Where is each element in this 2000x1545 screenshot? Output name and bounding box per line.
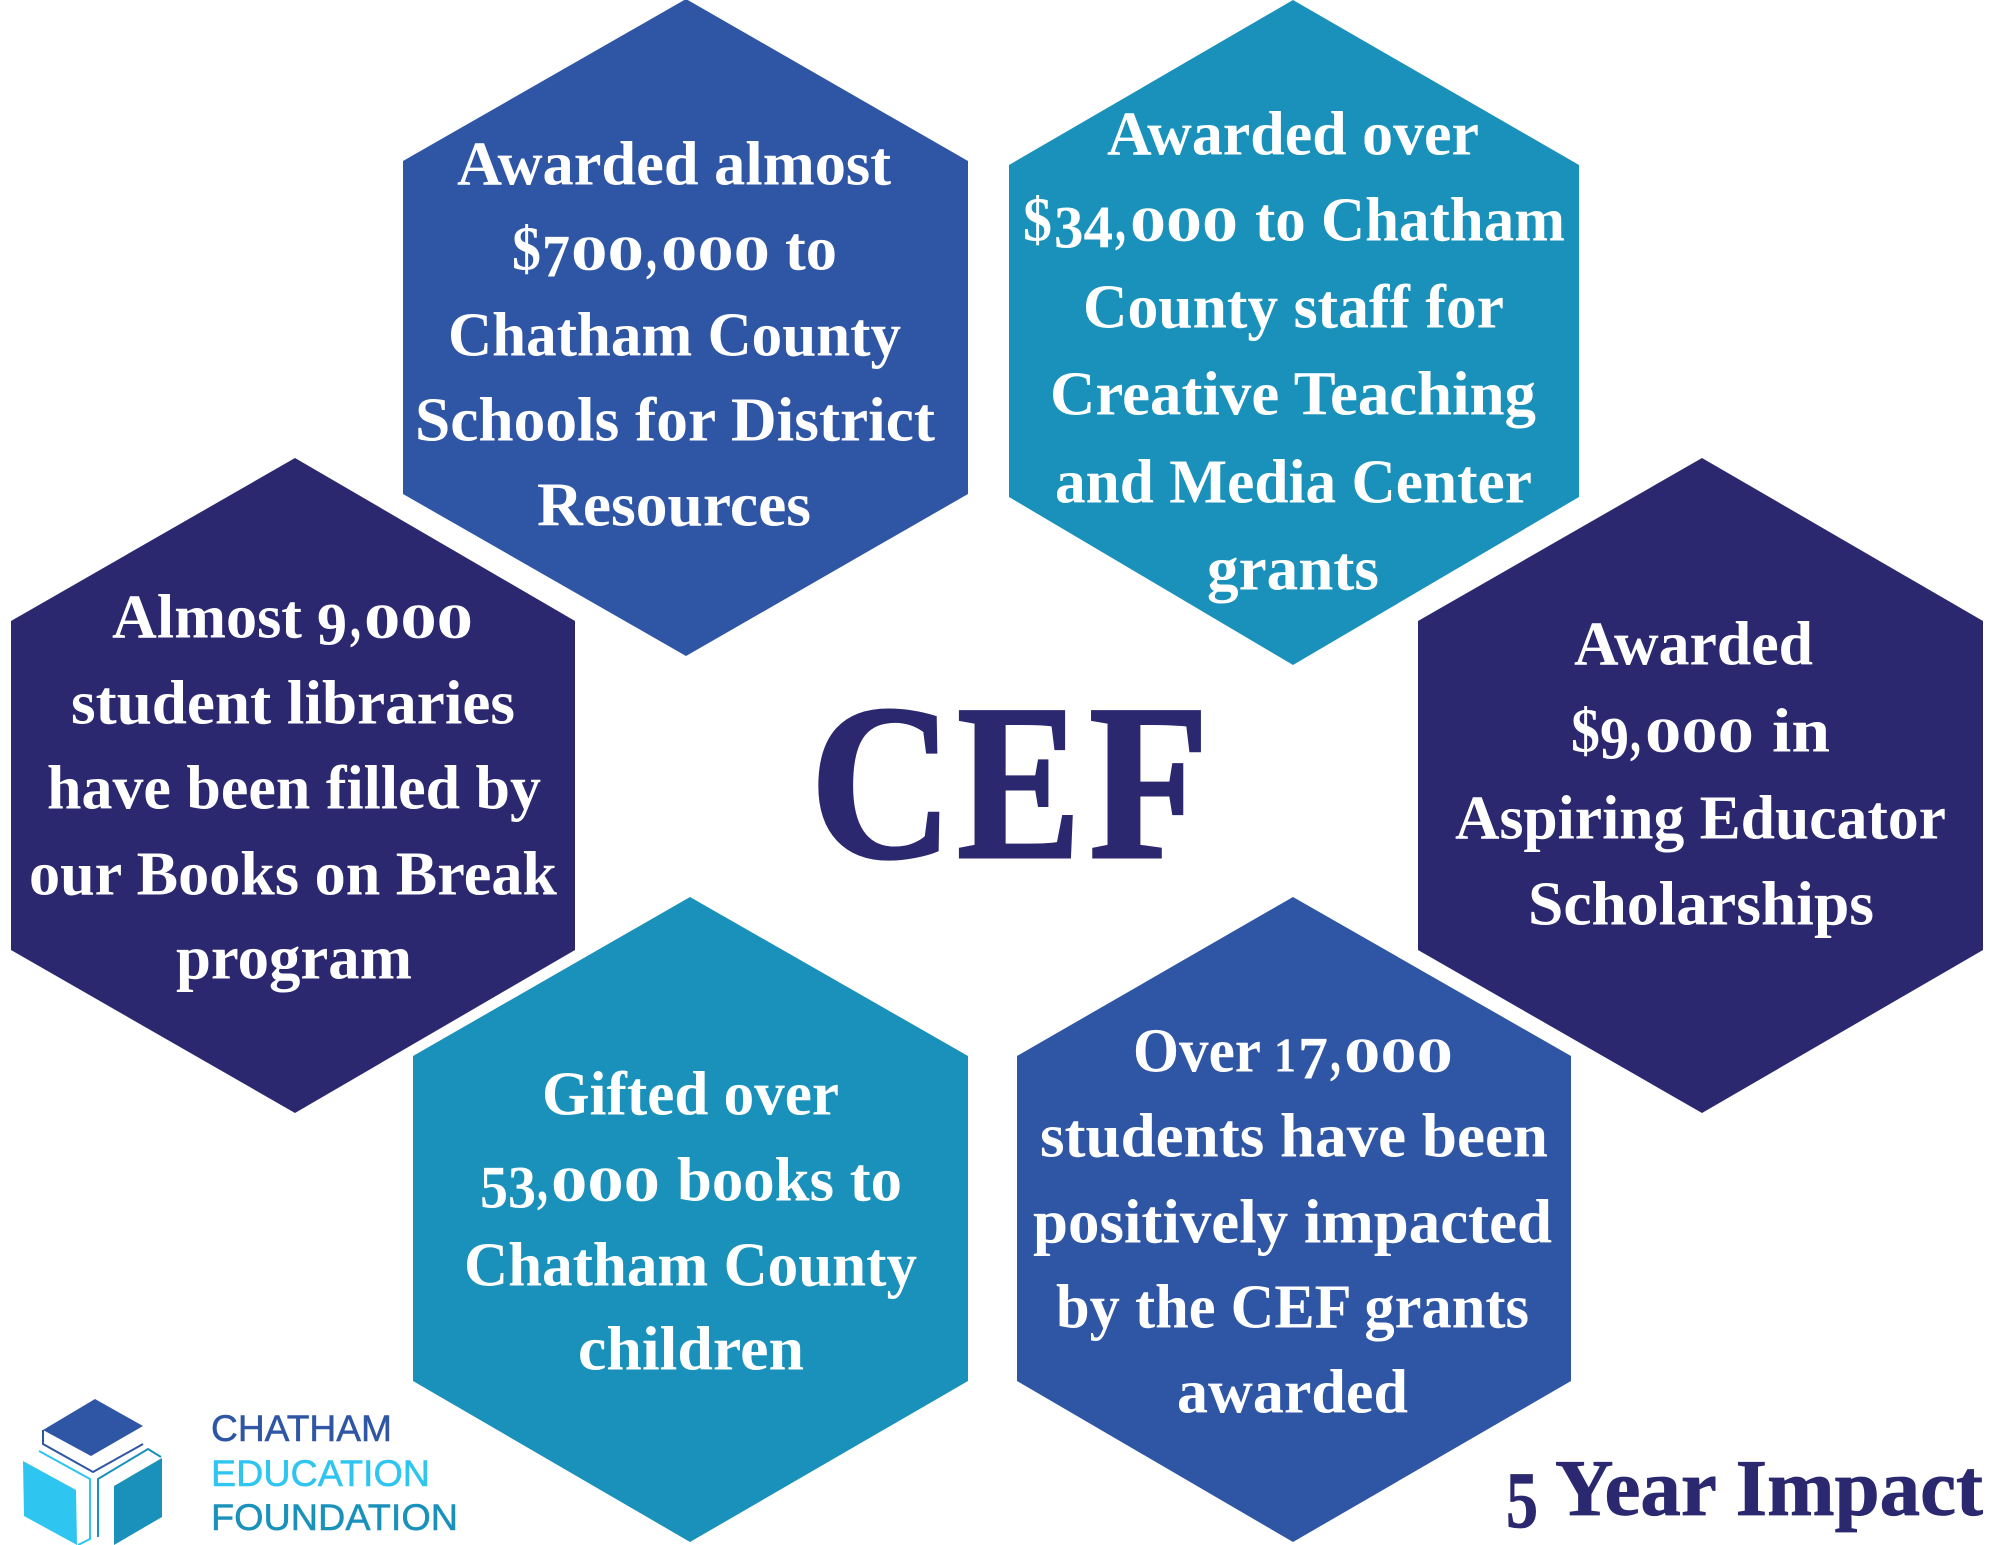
panel: student libraries hexagon <box>11 458 575 1113</box>
text block: students impacted: positively impacted <box>1033 1188 1552 1256</box>
text block: student libraries: our Books on Break <box>29 840 558 908</box>
text block: student libraries: student libraries <box>71 670 515 738</box>
text block: staff grants: to Chatham <box>1255 186 1565 254</box>
text block: staff grants: 000 <box>1130 196 1238 252</box>
text block: staff grants: 34 <box>1054 194 1113 260</box>
text block: district resources: $ <box>512 216 541 284</box>
text block: books gifted: , <box>537 1146 548 1214</box>
text block: books gifted: Chatham County <box>464 1232 917 1300</box>
text block: students impacted: awarded <box>1177 1358 1408 1426</box>
subtitle: 5 Year Impact: 5 <box>1506 1457 1538 1545</box>
text block: scholarships: Scholarships <box>1528 870 1874 938</box>
text block: district resources <box>415 130 935 540</box>
text block: student libraries <box>29 584 558 992</box>
text block: scholarships: 000 <box>1645 708 1754 762</box>
text block: staff grants: and Media Center <box>1055 448 1532 516</box>
icon: book and cube mark <box>23 1399 162 1545</box>
hexagon shape <box>1009 0 1579 665</box>
panel: district resources hexagon <box>403 0 968 656</box>
text block: students impacted: 7 <box>1298 1026 1328 1092</box>
text block: students impacted: , <box>1330 1018 1341 1086</box>
text block: student libraries: 000 <box>364 594 473 648</box>
text block: staff grants: County staff for <box>1083 274 1504 342</box>
panel: staff grants hexagon <box>1009 0 1579 665</box>
text block: students impacted: 000 <box>1344 1028 1453 1082</box>
text: logo wordmark: CHATHAM <box>211 1408 392 1449</box>
hexagon shape <box>1017 897 1571 1542</box>
text block: students impacted: students have been <box>1040 1102 1548 1170</box>
text: logo wordmark: EDUCATION <box>211 1453 430 1494</box>
title: CEF: C <box>810 660 953 906</box>
text block: district resources: , <box>646 216 657 284</box>
text block: staff grants: $ <box>1023 186 1052 254</box>
text block: books gifted: Gifted over <box>542 1060 839 1128</box>
title: CEF: E <box>957 660 1081 906</box>
text block: staff grants: grants <box>1207 536 1379 604</box>
text block: scholarships <box>1455 610 1946 938</box>
text block: district resources: Schools for District <box>415 386 935 454</box>
text block: students impacted <box>1033 1018 1552 1426</box>
text block: district resources: Resources <box>537 472 811 540</box>
hexagon shape <box>403 0 968 656</box>
text block: students impacted: 1 <box>1274 1028 1296 1082</box>
panel: books gifted hexagon <box>413 897 968 1542</box>
title: CEF: F <box>1089 660 1209 906</box>
text block: scholarships: Aspiring Educator <box>1455 784 1946 852</box>
text: logo wordmark <box>211 1408 458 1538</box>
text block: district resources: 7 <box>542 224 570 290</box>
logo: Chatham Education Foundation <box>23 1399 458 1545</box>
text block: scholarships: 9 <box>1600 706 1629 772</box>
text block: student libraries: have been filled by <box>47 754 541 822</box>
subtitle: 5 Year Impact: Year Impact <box>1555 1445 1983 1533</box>
text block: books gifted <box>464 1060 917 1384</box>
text block: staff grants <box>1023 100 1565 604</box>
text block: students impacted: by the CEF grants <box>1056 1274 1529 1342</box>
hexagon shape <box>413 897 968 1542</box>
text block: staff grants: Creative Teaching <box>1050 360 1536 428</box>
hexagon shape <box>1418 458 1983 1113</box>
text block: scholarships: Awarded <box>1574 610 1813 678</box>
text block: student libraries: Almost <box>112 584 302 652</box>
text block: scholarships: , <box>1630 698 1641 766</box>
text block: staff grants: Awarded over <box>1107 100 1479 168</box>
text block: books gifted: 53 <box>480 1154 536 1220</box>
text block: district resources: to <box>785 216 837 284</box>
panel: students impacted hexagon <box>1017 897 1571 1542</box>
text block: scholarships: $ <box>1571 698 1600 766</box>
text block: district resources: 00 <box>571 226 644 280</box>
text block: district resources: 000 <box>661 226 770 280</box>
text block: students impacted: Over <box>1133 1018 1261 1086</box>
hexagon shape <box>11 458 575 1113</box>
text: logo wordmark: FOUNDATION <box>211 1497 458 1538</box>
text block: student libraries: program <box>176 924 412 992</box>
text block: district resources: Chatham County <box>448 302 901 370</box>
text block: books gifted: 000 <box>551 1156 660 1212</box>
panel: scholarships hexagon <box>1418 458 1983 1113</box>
text block: student libraries: , <box>350 584 361 652</box>
text block: books gifted: children <box>578 1316 804 1384</box>
text block: scholarships: in <box>1772 698 1830 766</box>
text block: staff grants: , <box>1115 186 1126 254</box>
text block: district resources: Awarded almost <box>457 130 891 198</box>
text block: books gifted: books to <box>677 1146 902 1214</box>
text block: student libraries: 9 <box>317 592 347 658</box>
